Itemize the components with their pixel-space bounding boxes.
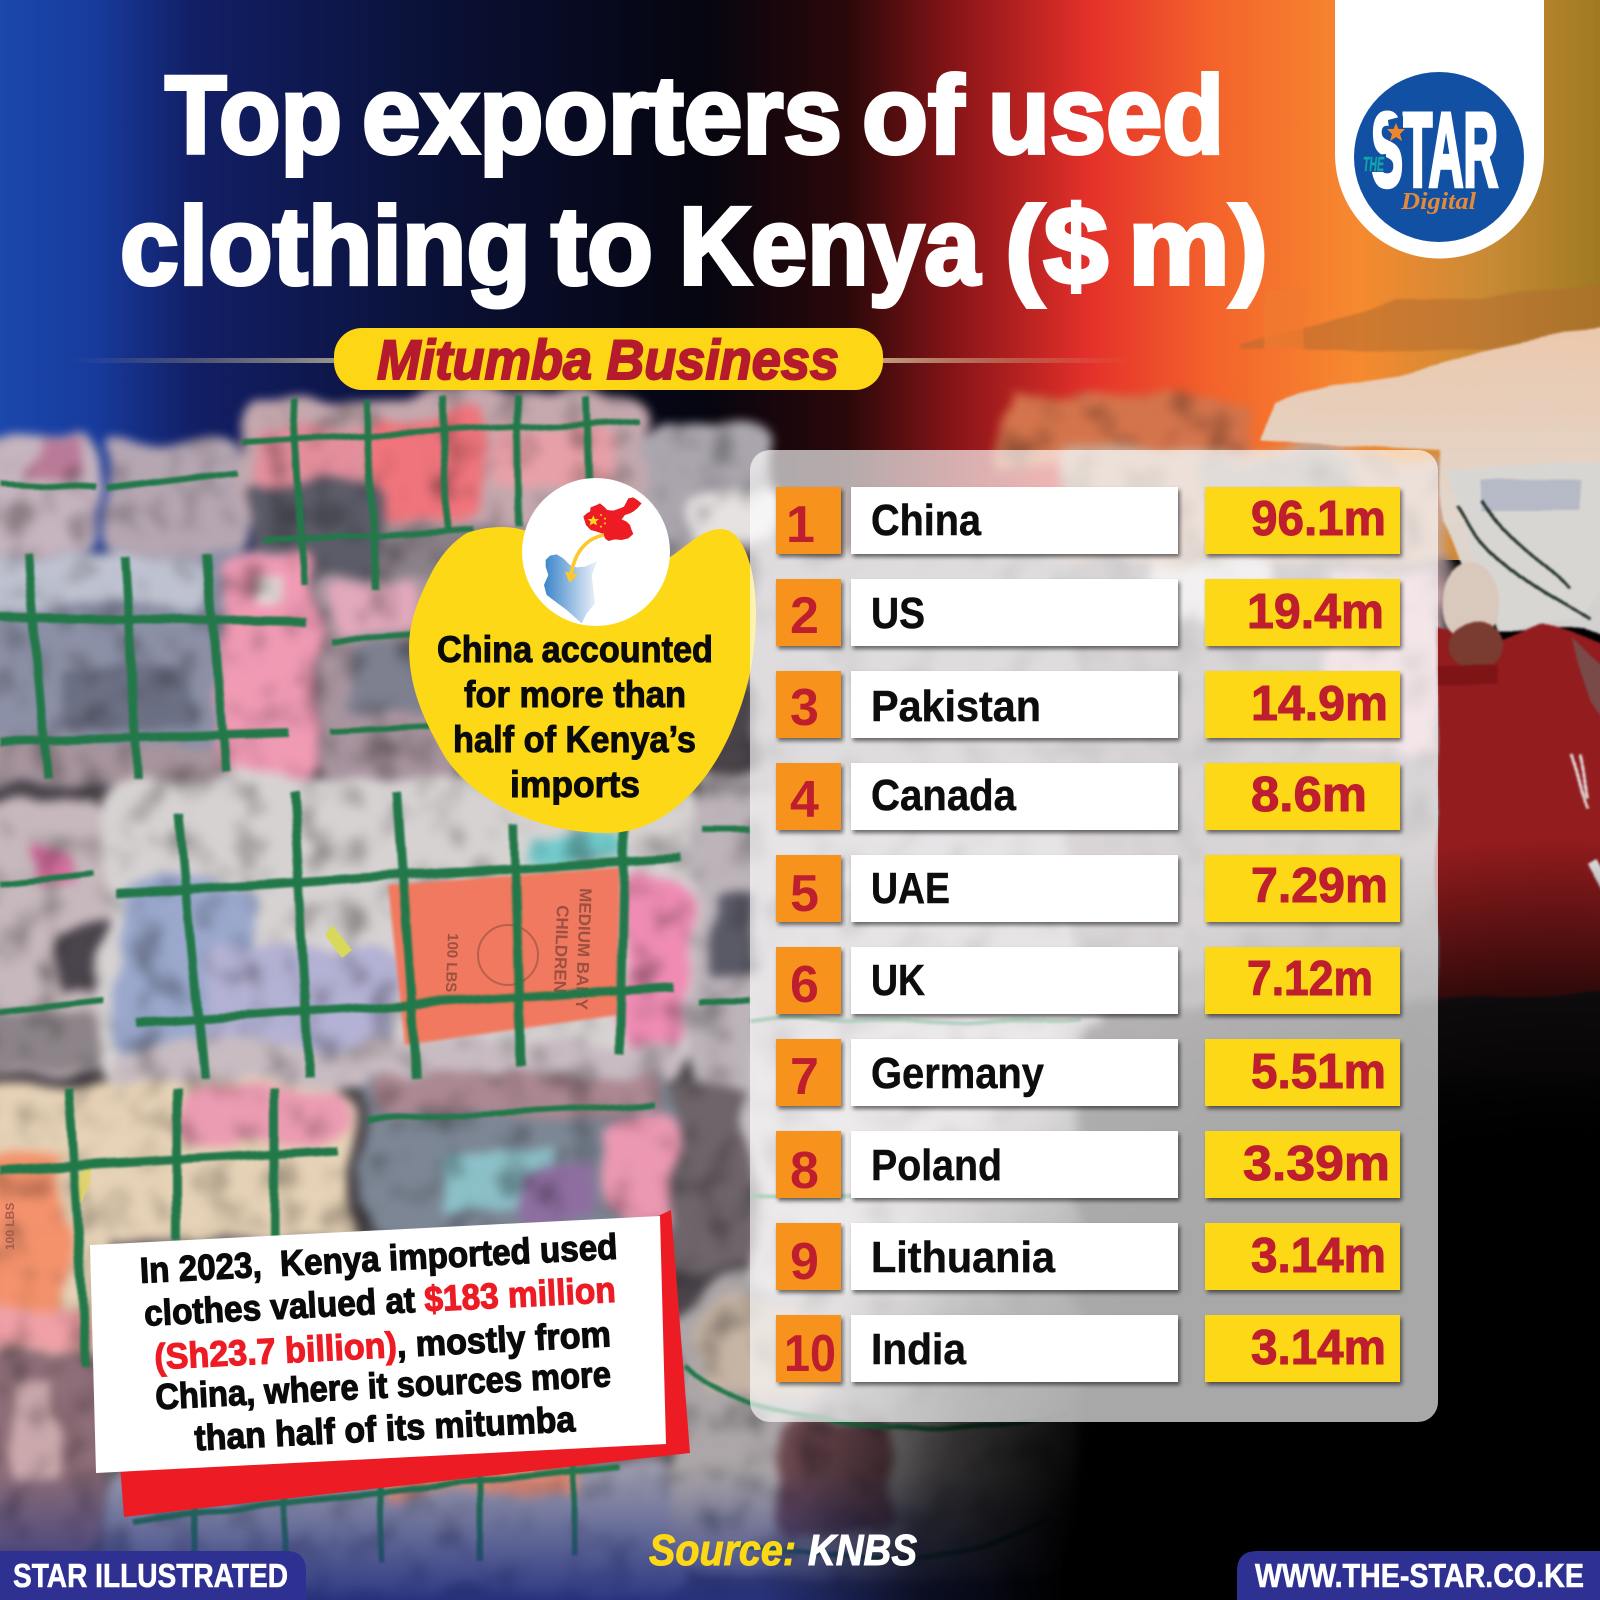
row 2 US [776, 579, 1400, 646]
row 8 Poland: 8 [790, 1142, 819, 1200]
row 8 Poland: Poland [871, 1141, 1002, 1190]
row 1 China: 96.1m [1251, 492, 1386, 546]
row 3 Pakistan [776, 671, 1400, 738]
dark lower-right corner [760, 840, 1600, 1600]
row 4 Canada: Canada [871, 771, 1016, 820]
subtitle pill: Mitumba Business: Mitumba Business [377, 328, 839, 391]
card text: China, where it sources more [154, 1353, 612, 1417]
printed label on the central bale: CHILDREN [550, 905, 572, 993]
strapping on bales [0, 395, 1100, 1560]
row 7 Germany: 5.51m [1251, 1045, 1386, 1099]
row 5 UAE: UAE [871, 864, 950, 913]
gaps between bales [0, 548, 1060, 1600]
row 10 India [776, 1315, 1400, 1383]
upper row [0, 436, 95, 554]
title: of [862, 54, 964, 177]
row 7 Germany [776, 1039, 1400, 1106]
row 6 UK: 6 [790, 956, 819, 1014]
card text [139, 1226, 627, 1461]
row 2 US: 2 [790, 587, 819, 645]
printed label on the central bale [3, 867, 620, 1250]
source line: Source: [649, 1526, 796, 1575]
row 4 Canada: 8.6m [1251, 768, 1367, 822]
row 5 UAE [776, 855, 1400, 923]
row 9 Lithuania: Lithuania [871, 1233, 1055, 1282]
callout text: imports [510, 764, 640, 805]
row 5 UAE: 5 [790, 865, 819, 923]
row 6 UK: UK [871, 956, 925, 1005]
red backing [120, 1210, 690, 1517]
callout card: 2023 imports [90, 1210, 690, 1517]
callout text: China accounted [437, 629, 713, 670]
panel: ranking table [750, 450, 1438, 1422]
yellow blob [409, 527, 756, 833]
printed label on the central bale: 100 LBS [3, 1203, 17, 1250]
footer tag: Star Illustrated [0, 1551, 306, 1600]
title: Kenya [679, 185, 981, 308]
row 7 Germany: Germany [871, 1049, 1044, 1098]
title: used [988, 54, 1224, 177]
source line: KNBS [808, 1526, 917, 1575]
row 5 UAE: 7.29m [1251, 859, 1388, 913]
row 3 Pakistan: Pakistan [871, 682, 1041, 731]
card text: clothes valued at $183 million [143, 1269, 617, 1334]
logo: The Star Digital: Digital [1400, 189, 1476, 215]
title: clothing [120, 185, 531, 308]
title: exporters [362, 54, 842, 177]
card text: In 2023, Kenya imported used [139, 1226, 618, 1291]
row 6 UK: 7.12m [1247, 952, 1373, 1006]
behind table [750, 550, 1070, 790]
footer tag: Star Illustrated: STAR ILLUSTRATED [13, 1557, 288, 1594]
logo: The Star Digital: THE [1363, 154, 1384, 176]
printed label on the central bale: MEDIUM BABY [572, 888, 595, 1011]
row 8 Poland [776, 1131, 1400, 1200]
row C [0, 1084, 354, 1359]
white card [90, 1216, 666, 1473]
callout text: half of Kenya’s [453, 719, 696, 760]
row 9 Lithuania [776, 1223, 1400, 1291]
middle large bale [0, 798, 110, 1074]
subtitle pill: Mitumba Business [68, 328, 1135, 391]
callout: China share [409, 478, 756, 833]
row 7 Germany: 7 [790, 1048, 819, 1106]
row 2 US: 19.4m [1247, 585, 1384, 639]
row 1 China: China [871, 496, 981, 545]
lower centre bale [677, 1279, 1081, 1579]
card text: (Sh23.7 billion), mostly from [153, 1313, 612, 1377]
callout text: for more than [464, 674, 686, 715]
top colour gradient band [0, 0, 1600, 560]
title: to [551, 185, 653, 308]
row 1 China [776, 487, 1400, 554]
logo: The Star Digital [1335, 0, 1544, 258]
row 10 India: 3.14m [1251, 1321, 1386, 1375]
card text: than half of its mitumba [193, 1398, 577, 1458]
row 2 US: US [871, 589, 925, 638]
row 6 UK [776, 947, 1400, 1014]
printed label on the central bale: 100 LBS [442, 933, 461, 993]
row 1 China: 1 [786, 496, 815, 554]
title [120, 54, 1268, 308]
callout text [437, 629, 713, 805]
white circle [522, 478, 670, 626]
lower left [0, 1350, 102, 1560]
row A right bale [320, 579, 460, 783]
source line [649, 1526, 917, 1575]
icon: map of China to Kenya [544, 497, 642, 623]
row 4 Canada [776, 763, 1400, 830]
row 9 Lithuania: 9 [790, 1233, 819, 1291]
title: m) [1128, 185, 1268, 308]
row A left bale [0, 550, 315, 788]
row 9 Lithuania: 3.14m [1251, 1229, 1386, 1283]
row 10 India: India [871, 1325, 966, 1374]
bottom navy fade [0, 1470, 1100, 1600]
row 3 Pakistan: 14.9m [1251, 677, 1388, 731]
porter carrying a bale [1240, 280, 1600, 1080]
title: ($ [1005, 185, 1108, 308]
row 4 Canada: 4 [790, 771, 819, 829]
row 8 Poland: 3.39m [1243, 1137, 1390, 1191]
row 10 India: 10 [784, 1325, 836, 1383]
title: Top [165, 54, 342, 177]
side pile beside table [698, 770, 768, 1100]
row 3 Pakistan: 3 [790, 679, 819, 737]
